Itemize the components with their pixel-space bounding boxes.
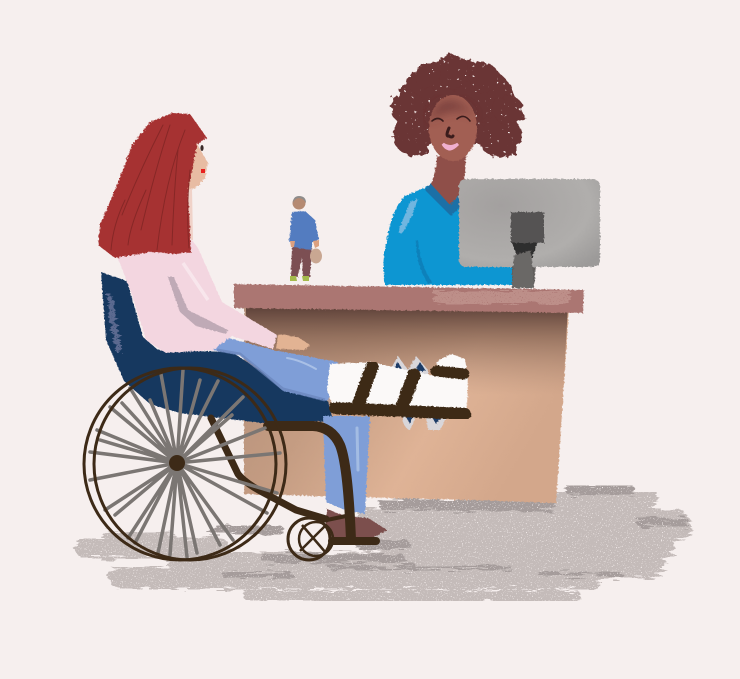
patient thigh	[213, 336, 338, 401]
desk logo marks	[389, 356, 448, 430]
agent sweater	[383, 185, 520, 285]
woman: seated patient	[98, 113, 338, 401]
plaster cast	[327, 354, 468, 408]
wheel rims	[84, 368, 286, 560]
wheelchair frame	[211, 418, 376, 541]
figurine hands	[290, 240, 319, 248]
figurine shirt	[289, 211, 319, 250]
lower leg	[323, 416, 370, 514]
monitor	[459, 179, 600, 288]
patient sweater	[117, 240, 277, 353]
figurine shoes	[290, 276, 309, 281]
agent arm shadow	[416, 240, 432, 284]
cast straps	[335, 367, 465, 414]
figurine head	[292, 196, 306, 210]
monitor stand neck	[512, 240, 538, 288]
leg cast with straps	[327, 354, 468, 414]
shoe	[326, 509, 387, 541]
figurine bag	[310, 248, 322, 264]
monitor screen	[459, 179, 600, 267]
patient face	[186, 142, 208, 192]
wheel hub	[169, 455, 185, 471]
figurine trousers	[291, 246, 312, 277]
backrest highlight	[106, 293, 122, 352]
sweater highlight	[183, 263, 208, 300]
agent neck	[431, 156, 466, 205]
agent sweater collar	[425, 183, 466, 216]
desk body	[244, 306, 569, 503]
wheelchair seat and backrest	[101, 272, 333, 423]
sweater shadow	[168, 277, 228, 334]
wheel spokes	[90, 370, 280, 557]
figurine: small older man with bag	[289, 196, 322, 281]
patient hand	[276, 334, 310, 350]
patient neck	[188, 188, 193, 240]
desk top	[234, 284, 584, 313]
agent hair	[391, 55, 523, 158]
hair strands	[111, 125, 190, 250]
agent: receptionist	[383, 55, 523, 285]
monitor stand	[511, 212, 544, 288]
agent sleeve highlight	[398, 199, 418, 234]
agent face	[429, 95, 477, 161]
patient hair	[98, 113, 207, 258]
agent facial features	[432, 116, 470, 149]
agent hairline shadow	[428, 101, 478, 122]
jeans highlight	[287, 358, 316, 369]
floor shadow scribbles	[85, 490, 685, 596]
small front caster wheel	[288, 518, 333, 560]
patient eye and lip	[200, 145, 205, 173]
large rear wheel	[84, 368, 286, 560]
thigh shadow	[217, 350, 325, 400]
